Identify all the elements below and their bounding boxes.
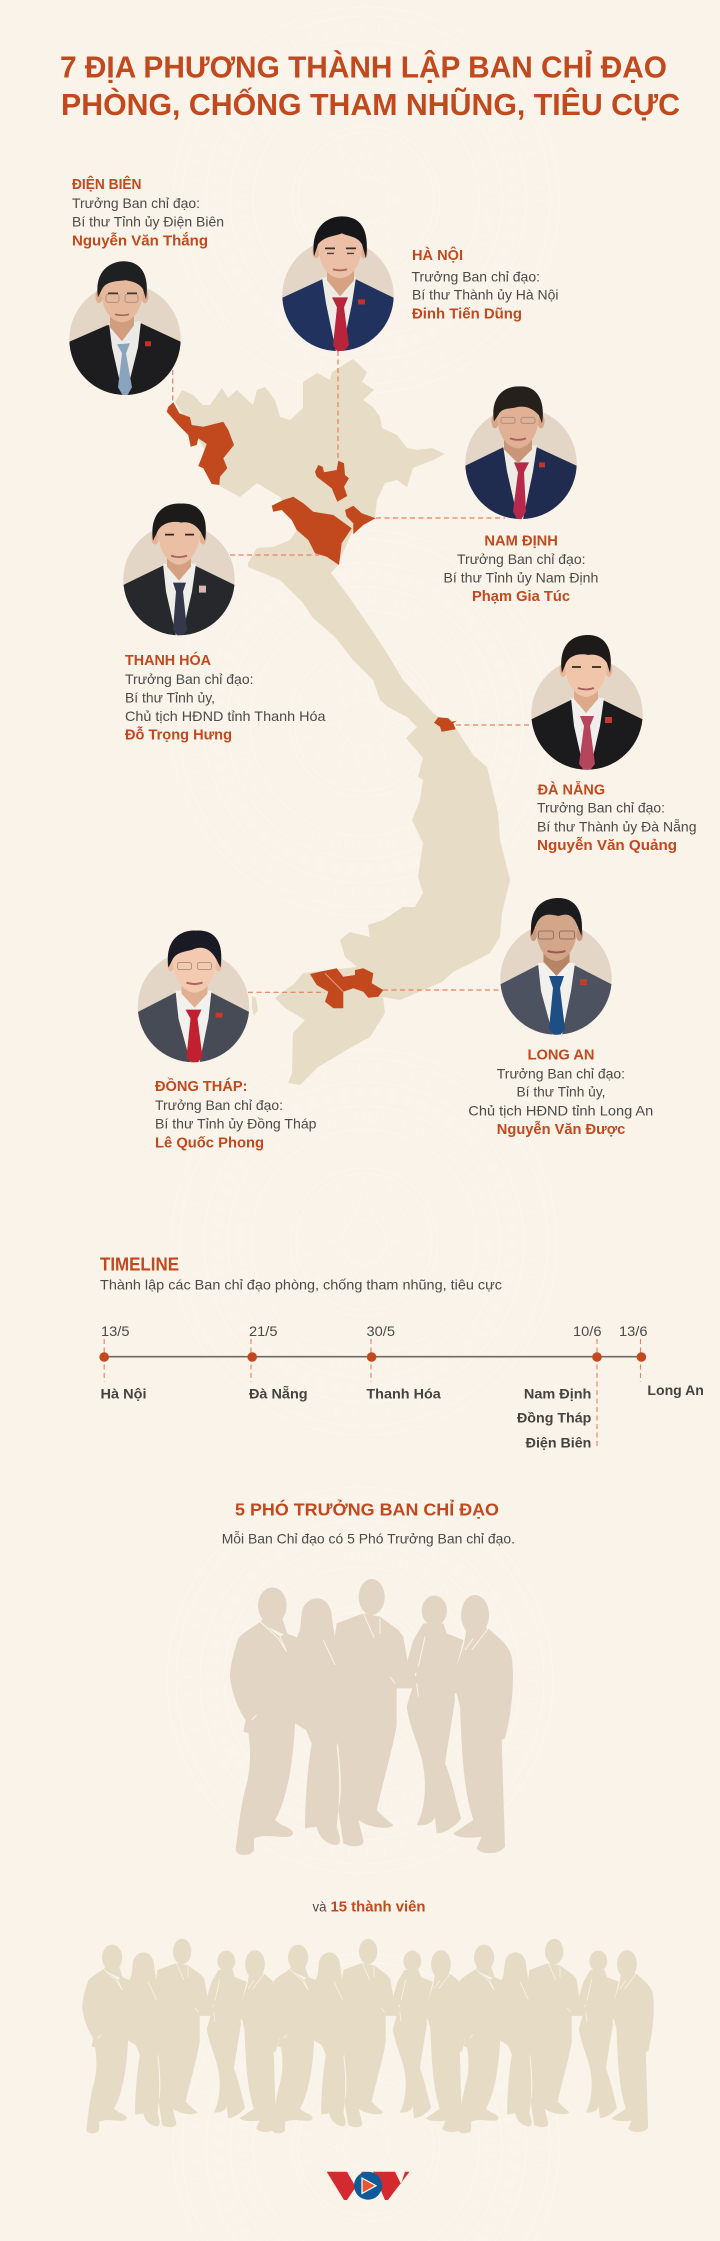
title [60,48,680,122]
timeline chart: Hà Nội [100,1385,146,1401]
watermark: bronze drum patterns [167,7,559,2241]
text: Dong Thap: Lê Quốc Phong [155,1135,264,1151]
timeline heading [100,1255,502,1292]
map: land [175,359,510,1085]
text: Ha Noi: HÀ NỘI [412,246,463,264]
portrait: Nguyen Van Duoc [499,898,613,1039]
text: Long An: Trưởng Ban chỉ đạo: [497,1065,625,1081]
text: Dong Thap: Trưởng Ban chỉ đạo: [155,1097,283,1113]
heading: 5 deputy heads: Mỗi Ban Chỉ đạo có 5 Phó Trưởng Ban chỉ đạo. [222,1530,515,1546]
text: Dien Bien: Bí thư Tỉnh ủy Điện Biên [72,214,224,230]
text: Thanh Hoa: Trưởng Ban chỉ đạo: [125,671,254,687]
text: Thanh Hoa: THANH HÓA [125,651,212,669]
text: Long An [468,1047,653,1138]
timeline chart: 13/6 [619,1323,648,1339]
text: Long An: LONG AN [528,1047,594,1063]
timeline chart: Điện Biên [526,1435,591,1451]
timeline chart: 21/5 [249,1323,278,1339]
portrait: Do Trong Hung [122,504,236,640]
text: Nam Dinh [444,534,598,605]
text: Dong Thap [155,1077,317,1151]
text: Dien Bien: Nguyễn Văn Thắng [72,232,208,250]
text: and 15 members: và [312,1898,327,1914]
text: Dien Bien: Trưởng Ban chỉ đạo: [72,195,200,211]
map: Ha Noi [315,461,349,502]
text: Thanh Hoa [125,651,326,744]
silhouettes: 5 deputies [230,1579,513,1855]
text: Dong Thap: Bí thư Tỉnh ủy Đồng Tháp [155,1115,317,1131]
text: and 15 members: 15 thành viên [330,1900,426,1916]
text: Ha Noi: Bí thư Thành ủy Hà Nội [412,286,558,302]
text: Dien Bien [72,175,224,250]
text: Ha Noi [412,246,558,322]
timeline chart: Đồng Tháp [517,1410,591,1426]
text: Da Nang: Nguyễn Văn Quảng [537,837,677,854]
timeline chart: Nam Định [524,1385,591,1401]
portrait: Pham Gia Tuc [464,386,578,523]
text: Ha Noi: Trưởng Ban chỉ đạo: [412,268,540,284]
title: PHÒNG, CHỐNG THAM NHŨNG, TIÊU CỰC [61,86,680,122]
connector lines [173,351,530,992]
map: Phu Quoc island [252,996,258,1016]
timeline chart: Đà Nẵng [249,1384,308,1401]
text: Long An: Nguyễn Văn Được [497,1121,625,1138]
text: Da Nang: Bí thư Thành ủy Đà Nẵng [537,818,696,834]
text: Dong Thap: ĐỒNG THÁP: [155,1077,248,1095]
portrait: Le Quoc Phong [136,931,250,1067]
text: Long An: Chủ tịch HĐND tỉnh Long An [468,1102,653,1118]
heading: 5 deputy heads: 5 PHÓ TRƯỞNG BAN CHỈ ĐẠO [235,1499,499,1520]
map: Nam Dinh [345,506,376,534]
timeline chart: 30/5 [366,1323,395,1339]
text: Ha Noi: Đinh Tiến Dũng [412,306,522,322]
timeline heading: Thành lập các Ban chỉ đạo phòng, chống tham nhũng, tiêu cực [100,1276,502,1292]
logo: VOV [327,2172,410,2200]
timeline chart: 10/6 [573,1323,602,1339]
map: Thanh Hoa [272,497,352,565]
text: Da Nang [537,781,696,854]
portrait: Nguyen Van Quang [530,635,644,774]
text: Da Nang: Trưởng Ban chỉ đạo: [537,800,665,816]
timeline chart: Long An [647,1382,704,1398]
timeline chart [99,1323,704,1451]
map: Dong Thap and Long An [310,968,383,1008]
text: Dien Bien: ĐIỆN BIÊN [72,175,142,193]
map: Dien Bien province [167,402,234,485]
text: Nam Dinh: Bí thư Tỉnh ủy Nam Định [444,570,598,586]
timeline heading: TIMELINE [100,1255,179,1275]
map: Da Nang [434,717,457,732]
timeline chart: 13/5 [101,1323,130,1339]
portrait: Dinh Tien Dung [281,216,395,355]
title: 7 ĐỊA PHƯƠNG THÀNH LẬP BAN CHỈ ĐẠO [60,48,667,84]
text: Nam Dinh: NAM ĐỊNH [484,534,558,550]
text: Da Nang: ĐÀ NẴNG [538,781,605,798]
silhouettes: 15 members [82,1939,654,2133]
text: Long An: Bí thư Tỉnh ủy, [516,1084,606,1100]
text: Nam Dinh: Trưởng Ban chỉ đạo: [457,551,586,567]
text: Thanh Hoa: Bí thư Tỉnh ủy, [125,689,215,705]
text: Nam Dinh: Phạm Gia Túc [472,589,570,605]
heading: 5 deputy heads [222,1499,515,1546]
text: Thanh Hoa: Chủ tịch HĐND tỉnh Thanh Hóa [125,708,326,724]
timeline chart: Thanh Hóa [366,1385,441,1401]
portrait: Nguyen Van Thang [68,261,182,399]
map of Vietnam [167,359,510,1085]
text: Thanh Hoa: Đỗ Trọng Hưng [125,727,232,744]
